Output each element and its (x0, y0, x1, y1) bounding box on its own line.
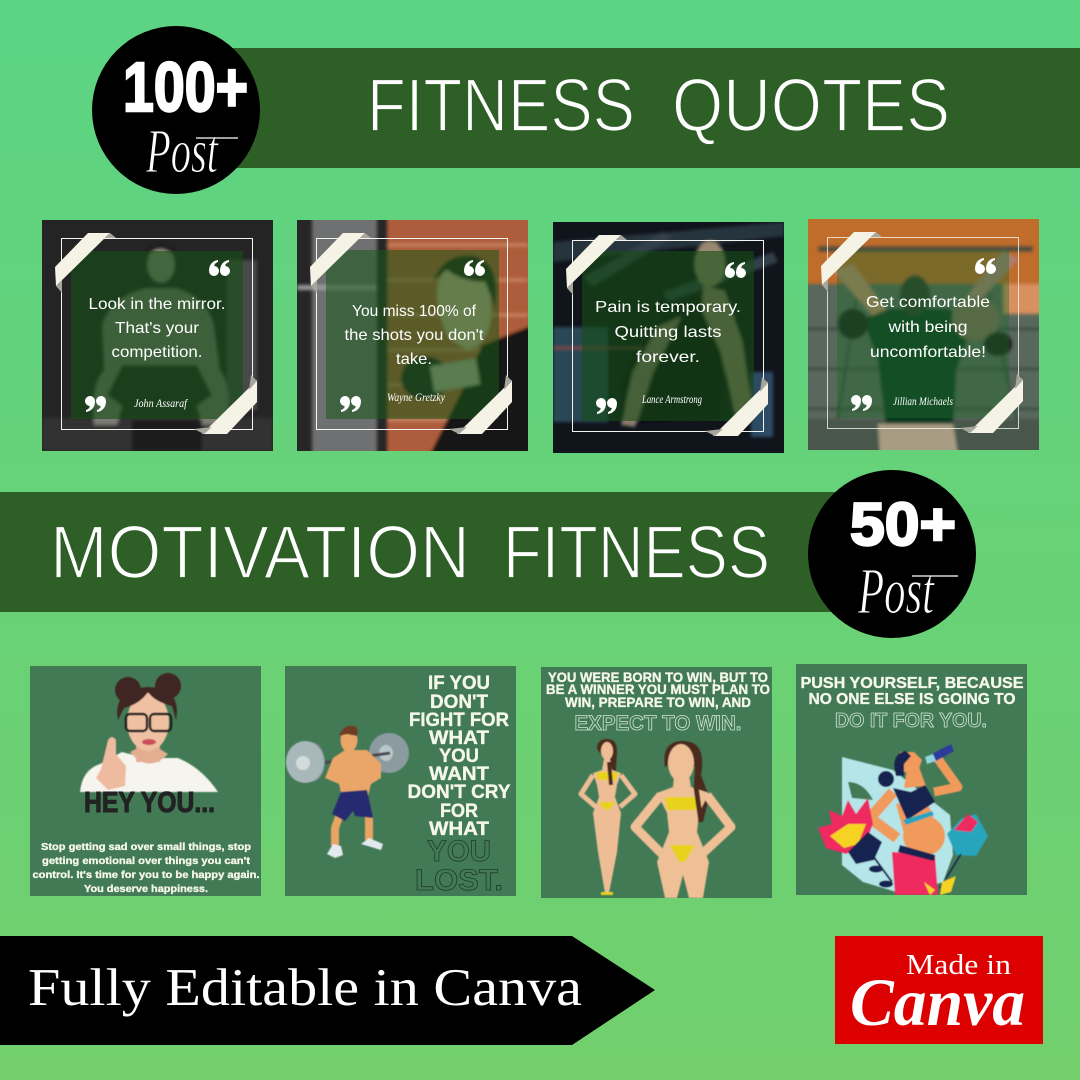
headline text: DON'T (430, 692, 488, 713)
headline text: WIN, PREPARE TO WIN, AND (565, 695, 751, 710)
body text: control. It's time for you to be happy again. (32, 869, 260, 881)
frame (316, 238, 508, 430)
headline text (408, 673, 511, 897)
motivation card 4: do it for you (796, 664, 1027, 895)
heading: motivation fitness (50, 510, 770, 594)
quote card 2: you miss 100%: take. (396, 351, 432, 368)
quote card 3: pain is temporary: Quitting lasts (614, 324, 722, 341)
heading: motivation fitness: MOTIVATION (50, 510, 470, 594)
motivation card 3: expect to win (541, 667, 772, 898)
overlay (326, 250, 499, 419)
headline text (546, 672, 770, 730)
quote card 4: get comfortable: Jillian Michaels (893, 394, 953, 408)
icon: opening quote (209, 260, 230, 276)
quote card 2: you miss 100%: Wayne Gretzky (387, 390, 446, 404)
quote card 4: get comfortable (803, 214, 1044, 455)
headline text: BE A WINNER YOU MUST PLAN TO (546, 682, 770, 697)
headline text: YOU WERE BORN TO WIN, BUT TO (548, 670, 768, 685)
badge: 100+ post: Post (145, 118, 219, 186)
heading: fitness quotes: FITNESS (367, 63, 635, 147)
icon: closing quote (340, 396, 361, 412)
ribbons (55, 233, 110, 286)
headline text: NO ONE ELSE IS GOING TO (808, 691, 1016, 708)
headline text: DON'T CRY (408, 782, 511, 803)
heading: fitness quotes (367, 63, 950, 147)
illustration: woman pointing (80, 673, 218, 792)
headline text (801, 676, 1024, 728)
illustration: weightlifter (286, 726, 409, 858)
heading: motivation fitness: FITNESS (503, 510, 770, 594)
headline text: WHAT (429, 728, 489, 749)
overlay (71, 251, 243, 419)
frame (572, 240, 764, 432)
frame (828, 238, 1018, 428)
motivation card 1: hey you (30, 666, 261, 896)
quote card 1: look in the mirror: Look in the mirror. (88, 296, 226, 313)
icon: closing quote (851, 395, 872, 411)
headline text: EXPECT TO WIN. (574, 712, 742, 735)
ribbons (821, 232, 876, 285)
body text: getting emotional over things you can't (42, 855, 251, 867)
icon: closing quote (596, 398, 617, 414)
illustration: small figure (581, 739, 635, 895)
headline text: WANT (429, 764, 489, 785)
quote card 1: look in the mirror: John Assaraf (134, 396, 188, 410)
banner: motivation fitness (0, 492, 840, 612)
badge: 50+ post: Post (857, 555, 935, 628)
badge: made in canva: Canva (850, 964, 1025, 1040)
banner: fully editable in canva (0, 936, 655, 1045)
quote card 3: pain is temporary: Lance Armstrong (641, 392, 702, 406)
icon: opening quote (725, 262, 746, 278)
frame (62, 238, 252, 430)
badge: 100+ post (92, 26, 260, 194)
illustration: woman drinking with flowers (818, 744, 988, 895)
heading: fitness quotes: QUOTES (672, 63, 950, 147)
quote card 2: you miss 100% (297, 215, 533, 456)
ribbons (566, 235, 621, 288)
quote card 3: pain is temporary (553, 222, 784, 453)
overlay (837, 250, 1009, 418)
headline text: LOST. (415, 864, 503, 897)
badge: 50+ post: 50+ (850, 491, 956, 558)
headline text: FOR (440, 801, 478, 822)
headline text: FIGHT FOR (409, 710, 509, 731)
quote card 4: get comfortable: uncomfortable! (870, 344, 986, 361)
banner: fully editable in canva: Fully Editable in Canva (28, 959, 582, 1017)
badge: made in canva: Made in (906, 949, 1012, 981)
headline text: YOU (439, 746, 479, 767)
headline text: WHAT (429, 819, 489, 840)
icon: opening quote (975, 258, 996, 274)
banner: fitness quotes (230, 48, 1080, 168)
body text: You deserve happiness. (84, 883, 208, 895)
hey you heading: HEY YOU... (84, 787, 215, 819)
quote card 1: look in the mirror (42, 220, 273, 451)
badge: made in canva (835, 936, 1043, 1044)
badge: 100+ post: 100+ (123, 48, 248, 126)
ribbons (310, 233, 365, 286)
quote card 1: look in the mirror: That's your (115, 320, 200, 337)
quote card 1: look in the mirror: competition. (112, 344, 202, 361)
overlay (582, 251, 754, 421)
illustration: large figure (635, 741, 731, 898)
quote card 3: pain is temporary: forever. (636, 349, 700, 366)
quote card 2: you miss 100%: You miss 100% of (352, 303, 477, 320)
quote card 2: you miss 100%: the shots you don't (344, 327, 484, 344)
headline text: DO IT FOR YOU. (835, 710, 987, 732)
headline text: YOU (427, 835, 491, 868)
quote card 3: pain is temporary: Pain is temporary. (595, 299, 741, 316)
body text (32, 841, 260, 895)
motivation card 2: weightlifter (285, 666, 516, 897)
headline text: IF YOU (428, 673, 490, 694)
badge: 50+ post (808, 470, 976, 638)
headline text: PUSH YOURSELF, BECAUSE (800, 675, 1024, 692)
quote card 4: get comfortable: Get comfortable (866, 294, 990, 311)
icon: opening quote (464, 260, 485, 276)
quote card 4: get comfortable: with being (887, 319, 968, 336)
body text: Stop getting sad over small things, stop (41, 841, 251, 853)
icon: closing quote (85, 396, 106, 412)
